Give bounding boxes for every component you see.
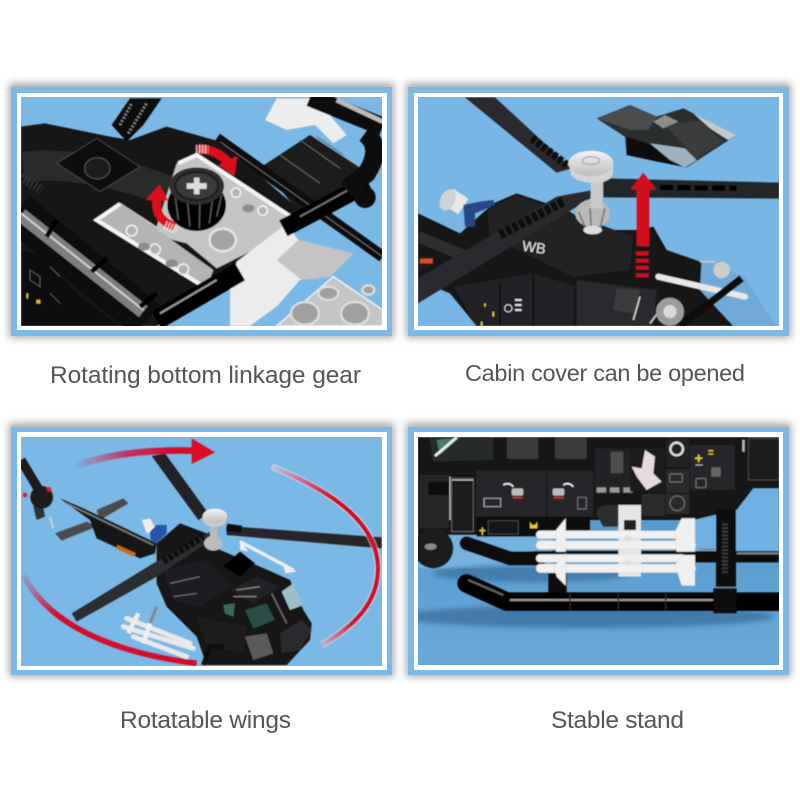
photo: gear close-up — [17, 97, 383, 326]
photo: rotor and open cabin cover: WB — [521, 239, 547, 258]
caption: stable stand: Stable stand — [551, 707, 684, 734]
panel: rotating bottom linkage gear — [9, 83, 394, 338]
photo: helicopter with rotation arrows — [21, 438, 382, 665]
caption: cabin cover can be opened: Cabin cover can be opened — [465, 360, 745, 386]
panel: stable stand — [400, 423, 791, 677]
panel: rotatable wings — [9, 423, 394, 677]
photo: landing stand and missiles — [400, 437, 779, 628]
panel: cabin cover can be opened — [406, 83, 791, 338]
photo: rotor and open cabin cover — [418, 97, 779, 326]
caption: rotatable wings: Rotatable wings — [120, 707, 291, 734]
caption: rotating bottom linkage gear: Rotating bottom linkage gear — [50, 362, 361, 389]
